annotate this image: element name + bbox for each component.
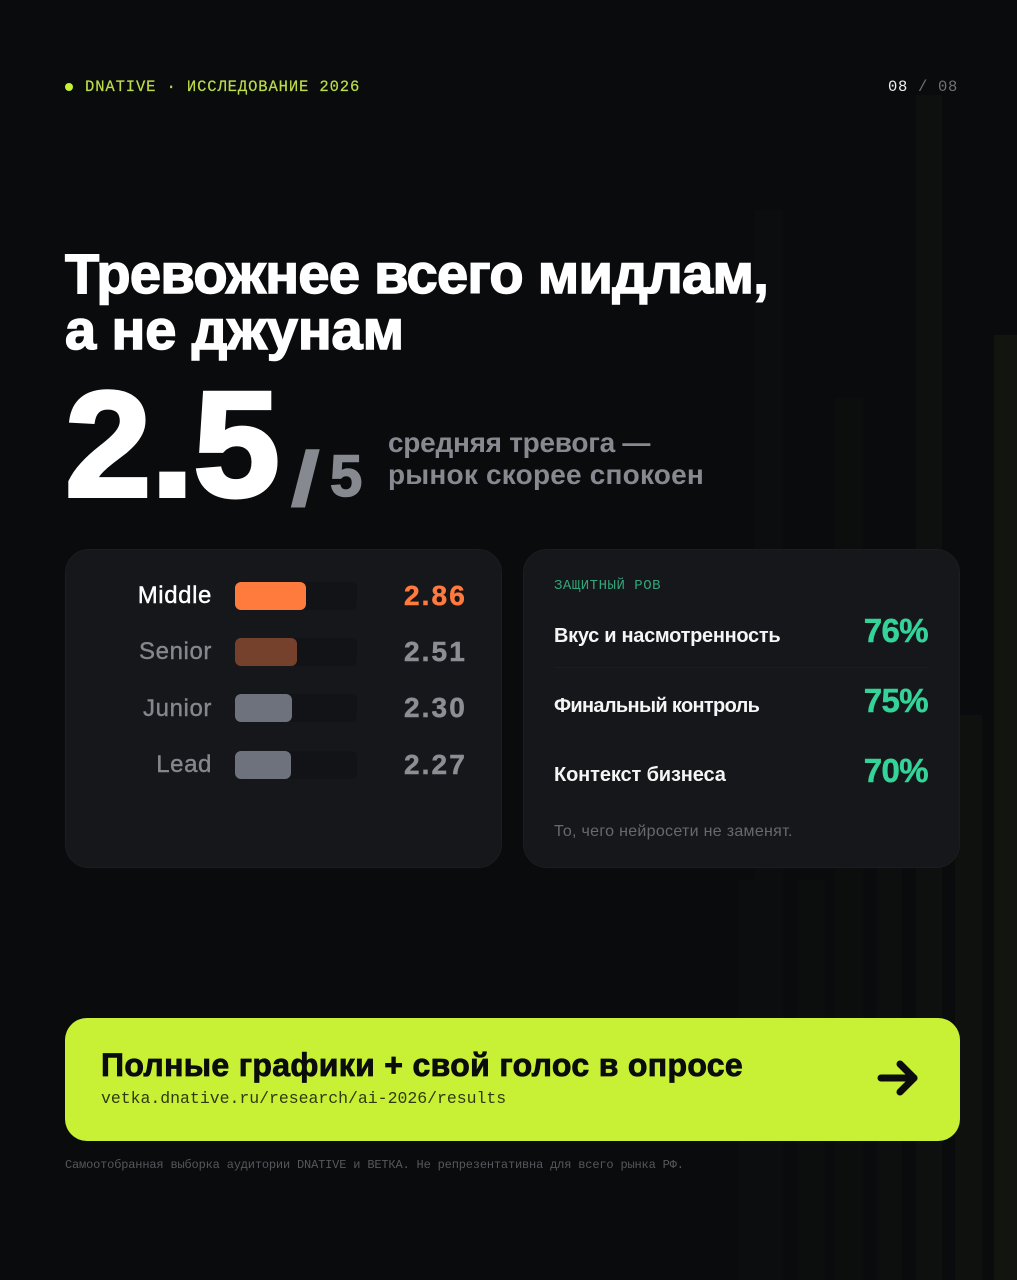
score caption [388,427,704,490]
value: Senior: 2.51 [404,636,467,667]
panel: protective moat [523,549,960,868]
value: Middle: 2.86 [404,580,467,611]
score scale slash: / [291,437,320,522]
row value: 76%: 76% [864,612,928,649]
grade label: Junior: Junior [143,695,212,722]
grade label: Lead: Lead [156,751,212,778]
panel note: То, чего нейросети не заменят. [554,823,793,840]
score caption: средняя тревога — [388,427,650,458]
cta heading: Полные графики + свой голос в опросе [101,1047,743,1083]
score value: 2.5 [65,360,279,528]
panel heading: ЗАЩИТНЫЙ РОВ [554,578,661,594]
row label: final control: Финальный контроль [554,695,759,717]
title: а не джунам [65,298,404,361]
panel: anxiety by grade [65,549,502,868]
bar track: Lead [235,751,357,779]
row value: 75%: 75% [864,682,928,719]
bar track: Senior [235,638,357,666]
bar: Middle [235,582,306,610]
grade label: Middle: Middle [138,582,212,609]
header label: DNATIVE · ИССЛЕДОВАНИЕ 2026 [85,78,360,96]
footnote: Самоотобранная выборка аудитории DNATIVE и ВЕТКА. Не репрезентативна для всего рынка РФ. [65,1158,684,1172]
row divider [554,667,929,668]
bar: Junior [235,694,292,722]
grade label: Senior: Senior [139,638,212,665]
icon: arrow [878,1060,918,1096]
row label: business context: Контекст бизнеса [554,764,726,786]
big score [65,360,362,528]
bar track: Middle [235,582,357,610]
page counter: 08 / 08 [888,78,958,96]
value: Lead: 2.27 [404,749,467,780]
value: Junior: 2.30 [404,692,467,723]
cta url: vetka.dnative.ru/research/ai-2026/results [101,1089,506,1108]
row label: taste: Вкус и насмотренность [554,625,780,647]
title [64,242,768,362]
score caption: рынок скорее спокоен [388,459,704,490]
bar track: Junior [235,694,357,722]
row value: 70%: 70% [864,752,928,789]
bar: Senior [235,638,297,666]
bar: Lead [235,751,291,779]
icon: lime dot [65,83,73,91]
title: Тревожнее всего мидлам, [65,242,768,305]
score scale value: 5 [330,444,362,509]
call to action banner [65,1018,960,1141]
